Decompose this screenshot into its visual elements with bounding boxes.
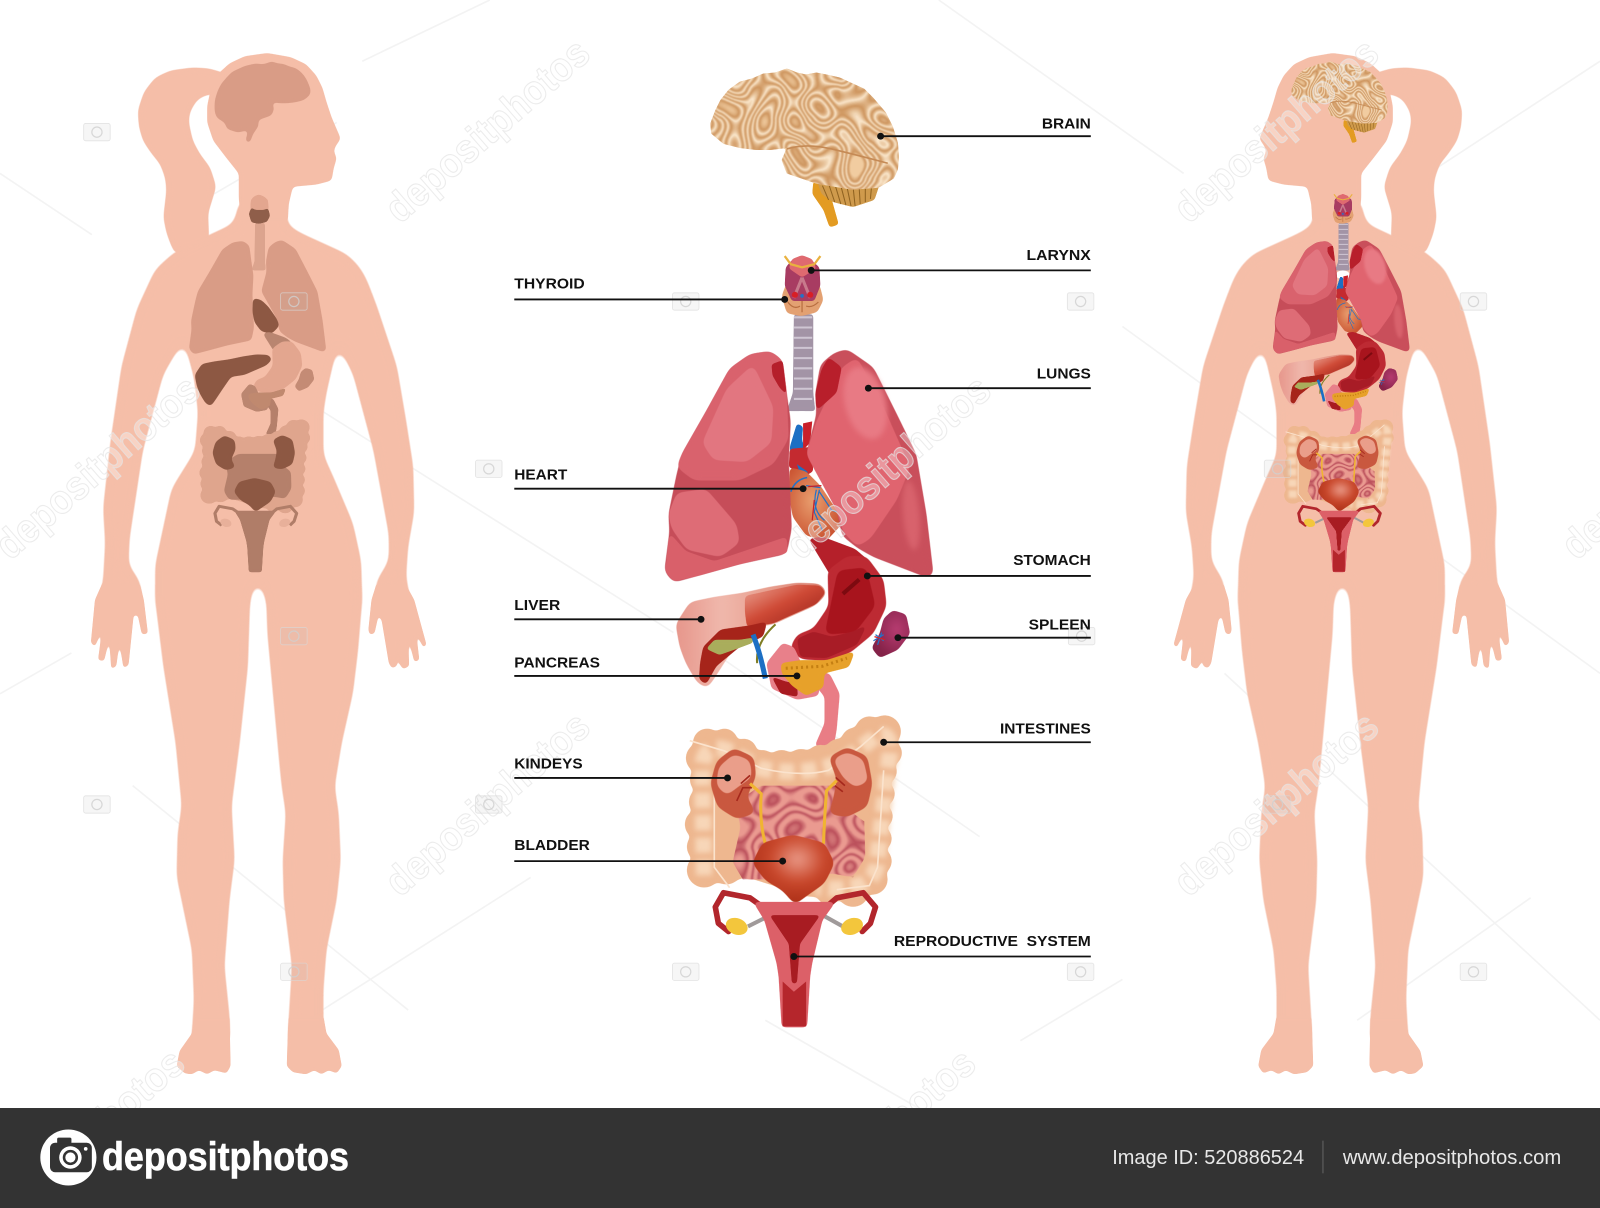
figure: left silhouette bbox=[91, 53, 427, 1074]
colon bbox=[685, 715, 902, 907]
label: lungs bbox=[865, 367, 1091, 392]
figure: right silhouette bbox=[1173, 53, 1509, 1074]
flat organs silhouette bbox=[189, 194, 326, 572]
website: www.depositphotos.com bbox=[1342, 1147, 1561, 1169]
liver bbox=[676, 583, 828, 689]
label: reproductive system: REPRODUCTIVE SYSTEM bbox=[894, 934, 1091, 950]
watermark pattern: depositphotos bbox=[376, 29, 598, 231]
bronchi gap bbox=[789, 411, 815, 430]
ureters bbox=[750, 781, 837, 844]
footer bar bbox=[0, 1108, 1600, 1208]
label: thyroid bbox=[514, 277, 788, 303]
label: kidneys bbox=[514, 756, 731, 781]
uterus bbox=[715, 893, 876, 1027]
watermark pattern: depositphotos bbox=[376, 703, 598, 905]
pancreas bbox=[781, 651, 855, 696]
trachea bbox=[787, 314, 815, 411]
label: pancreas: PANCREAS bbox=[514, 655, 600, 671]
label: lungs: LUNGS bbox=[1037, 367, 1091, 383]
label: heart: HEART bbox=[514, 468, 567, 484]
small intestine tube bbox=[813, 671, 840, 747]
label: larynx bbox=[808, 248, 1091, 274]
icon: camera logo bbox=[40, 1129, 96, 1186]
watermark pattern: depositphotos bbox=[777, 366, 999, 568]
mirrored body silhouette bbox=[1173, 53, 1509, 1074]
label: intestines: INTESTINES bbox=[1000, 722, 1091, 738]
label: larynx: LARYNX bbox=[1027, 248, 1091, 264]
label: bladder bbox=[514, 838, 786, 865]
label: spleen bbox=[894, 618, 1091, 641]
silhouette body with ponytail bbox=[91, 53, 427, 1074]
label: reproductive system bbox=[790, 934, 1091, 960]
watermark pattern: depositphotos bbox=[1164, 703, 1387, 905]
label: thyroid: THYROID bbox=[514, 277, 585, 293]
label: kidneys: KINDEYS bbox=[514, 756, 583, 772]
label: liver: LIVER bbox=[514, 598, 561, 614]
label: brain: BRAIN bbox=[1042, 117, 1091, 133]
label: liver bbox=[514, 598, 704, 623]
label: heart bbox=[514, 468, 807, 492]
kidneys bbox=[710, 747, 872, 819]
label: intestines bbox=[880, 722, 1091, 746]
flat brain silhouette bbox=[214, 61, 311, 143]
heart bbox=[789, 421, 842, 541]
label: bladder: BLADDER bbox=[514, 838, 590, 854]
watermark pattern: depositphotos bbox=[1164, 29, 1387, 231]
label: stomach: STOMACH bbox=[1013, 553, 1091, 569]
esophagus segment bbox=[808, 537, 869, 577]
centre: detailed brain bbox=[710, 68, 899, 228]
label: spleen: SPLEEN bbox=[1029, 618, 1091, 634]
coloured brain copy bbox=[1291, 61, 1388, 143]
image id: Image ID: 520886524 bbox=[1112, 1147, 1304, 1169]
larynx bbox=[785, 255, 820, 301]
duodenum bbox=[766, 643, 821, 700]
label: pancreas bbox=[514, 655, 800, 679]
centre: detailed organs bbox=[664, 255, 934, 1027]
label: brain bbox=[877, 117, 1091, 140]
thyroid bbox=[782, 283, 823, 316]
label: stomach bbox=[864, 553, 1091, 579]
callout labels bbox=[514, 117, 1091, 960]
right lung bbox=[806, 349, 934, 577]
coloured organs copy bbox=[1273, 194, 1410, 572]
bladder bbox=[752, 835, 835, 905]
left lung bbox=[664, 351, 792, 583]
small intestine coils bbox=[733, 786, 865, 879]
spleen bbox=[871, 610, 910, 658]
stomach bbox=[790, 556, 887, 661]
logo text: depositphotos bbox=[102, 1135, 349, 1179]
